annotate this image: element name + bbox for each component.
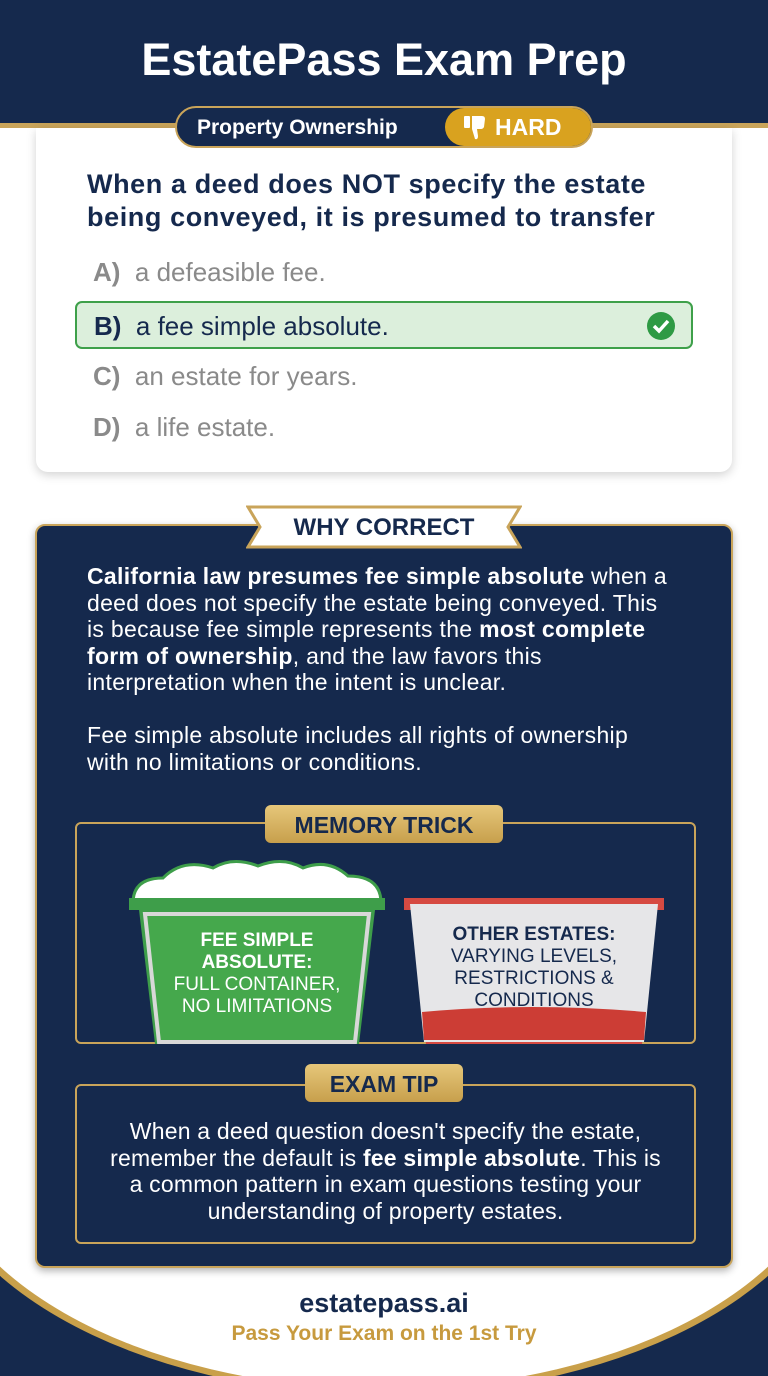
panel: why correct bbox=[35, 524, 733, 1268]
explanation text: California law presumes fee simple absolute when a bbox=[87, 563, 667, 589]
exam tip label: EXAM TIP bbox=[330, 1071, 438, 1097]
memory trick label bbox=[265, 805, 503, 843]
why correct banner: WHY CORRECT bbox=[294, 514, 475, 541]
bucket: fee simple: FEE SIMPLE bbox=[201, 930, 313, 951]
exam tip label bbox=[305, 1064, 463, 1102]
question text bbox=[87, 169, 655, 232]
icon: thumbs down bbox=[464, 116, 485, 140]
memory trick box bbox=[75, 822, 696, 1044]
memory trick label: MEMORY TRICK bbox=[295, 812, 473, 838]
question text: being conveyed, it is presumed to transfer bbox=[87, 202, 655, 232]
explanation text bbox=[87, 563, 667, 774]
footer url: estatepass.ai bbox=[299, 1288, 469, 1318]
category pill bbox=[175, 106, 593, 148]
exam tip box bbox=[75, 1084, 696, 1244]
bucket: other estates: VARYING LEVELS, bbox=[451, 946, 617, 967]
bucket: other estates: OTHER ESTATES: bbox=[453, 924, 615, 945]
option A: A) a defeasible fee. bbox=[93, 257, 326, 287]
explanation text: is because fee simple represents the most complete bbox=[87, 616, 645, 642]
exam tip text: remember the default is fee simple absolute. This is bbox=[110, 1144, 661, 1170]
exam tip text: understanding of property estates. bbox=[208, 1198, 563, 1224]
explanation text: with no limitations or conditions. bbox=[87, 748, 422, 774]
exam tip text: When a deed question doesn't specify the estate, bbox=[130, 1118, 641, 1144]
why correct banner bbox=[246, 506, 522, 548]
question card bbox=[36, 128, 732, 472]
option C: C) an estate for years. bbox=[93, 361, 357, 391]
option B correct: B) a fee simple absolute. bbox=[94, 311, 389, 341]
title: EstatePass Exam Prep bbox=[141, 34, 627, 85]
explanation text: interpretation when the intent is unclear. bbox=[87, 669, 506, 695]
explanation text: deed does not specify the estate being conveyed. This bbox=[87, 590, 657, 616]
difficulty badge bbox=[445, 108, 595, 146]
explanation text: form of ownership, and the law favors this bbox=[87, 642, 542, 668]
category pill: Property Ownership bbox=[197, 116, 398, 139]
exam tip text bbox=[110, 1118, 661, 1224]
explanation text: Fee simple absolute includes all rights of ownership bbox=[87, 722, 628, 748]
bucket: fee simple: NO LIMITATIONS bbox=[182, 996, 332, 1017]
question text: When a deed does NOT specify the estate bbox=[87, 169, 646, 199]
option D: D) a life estate. bbox=[93, 412, 275, 442]
difficulty badge: HARD bbox=[495, 114, 561, 140]
bucket: other estates: RESTRICTIONS & bbox=[454, 968, 614, 989]
exam tip text: a common pattern in exam questions testing your bbox=[130, 1171, 641, 1197]
bucket: fee simple: ABSOLUTE: bbox=[202, 952, 312, 973]
bucket: other estates: CONDITIONS bbox=[474, 990, 594, 1011]
bucket: other estates bbox=[404, 898, 664, 1044]
option B correct bbox=[75, 301, 693, 349]
footer tagline: Pass Your Exam on the 1st Try bbox=[231, 1322, 536, 1345]
bucket: fee simple: FULL CONTAINER, bbox=[174, 974, 340, 995]
icon: check bbox=[647, 312, 675, 340]
bucket: fee simple bbox=[129, 860, 385, 1044]
